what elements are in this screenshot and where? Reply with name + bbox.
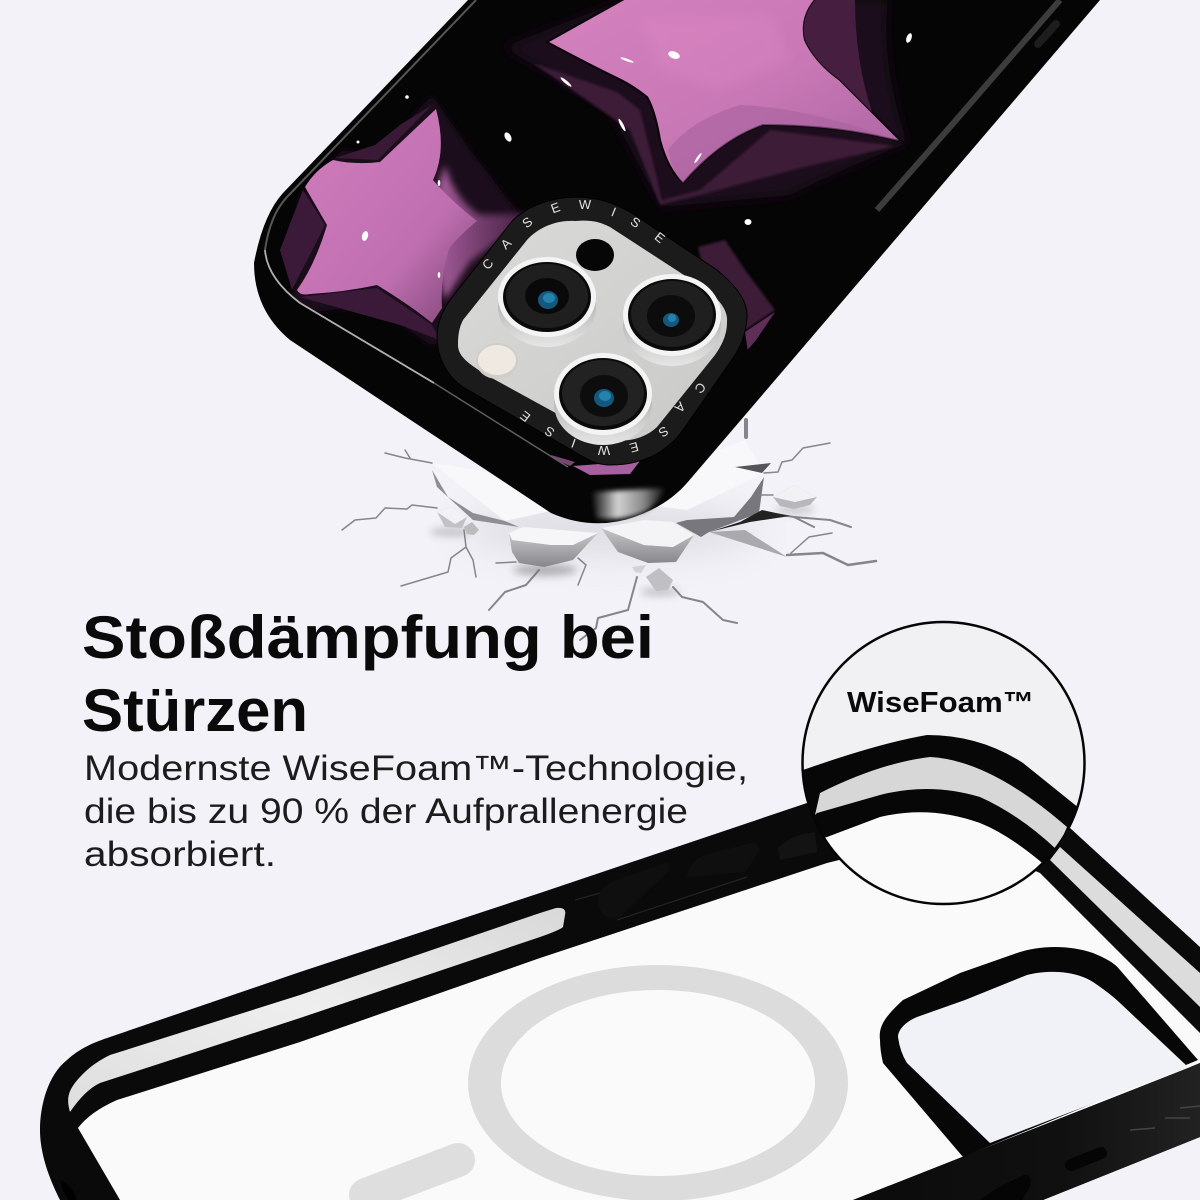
CASEWISE engraved text top bbox=[479, 197, 668, 272]
CASEWISE engraved text top: W bbox=[579, 197, 592, 212]
foam strip right bbox=[1050, 847, 1200, 1007]
foam strip left bbox=[68, 908, 565, 1112]
third star behind camera bbox=[698, 240, 775, 330]
CASEWISE engraved text bottom: S bbox=[542, 423, 557, 440]
lens 2 bbox=[623, 274, 721, 366]
CASEWISE engraved text bottom: E bbox=[628, 439, 640, 456]
phone with star case bbox=[254, 0, 1100, 523]
camera cut-out bbox=[880, 947, 1198, 1157]
camera module bbox=[437, 197, 747, 465]
fragment: centre chunk bbox=[601, 520, 694, 563]
clear case with black bumper bbox=[40, 780, 1200, 1200]
bumper lower-left slot bbox=[60, 1180, 77, 1200]
big star bbox=[503, 0, 907, 207]
CASEWISE engraved text bottom: S bbox=[655, 423, 671, 441]
microphone hole bbox=[576, 239, 614, 271]
WiseFoam magnifier callout bbox=[801, 620, 1086, 906]
CASEWISE engraved text top: E bbox=[652, 229, 668, 246]
phone edge highlights bbox=[265, 0, 476, 250]
bumper highlight streaks bbox=[1130, 1106, 1200, 1130]
flash bbox=[476, 343, 518, 379]
clear back panel bbox=[78, 849, 1200, 1200]
bottom corner reflection bbox=[592, 488, 665, 519]
heading: Stürzen bbox=[82, 677, 308, 744]
camera window bbox=[458, 221, 727, 440]
camera bezel bbox=[437, 197, 747, 465]
impact cracks in the ground bbox=[342, 420, 876, 640]
MagSafe alignment bar bbox=[366, 1160, 458, 1195]
CASEWISE engraved text bottom: A bbox=[672, 399, 688, 416]
CASEWISE engraved text top: C bbox=[479, 255, 496, 272]
CASEWISE engraved text bottom: I bbox=[569, 436, 578, 451]
lens 3 bbox=[554, 353, 652, 445]
CASEWISE engraved text bottom: E bbox=[517, 408, 533, 425]
body text: die bis zu 90 % der Aufprallenergie bbox=[84, 792, 688, 831]
fragment: left chunk bbox=[509, 527, 598, 567]
case bumper bbox=[40, 780, 1200, 1200]
body text: Modernste WiseFoam™-Technologie, bbox=[84, 749, 748, 788]
CASEWISE engraved text top: S bbox=[628, 214, 644, 231]
heading bbox=[82, 604, 654, 744]
MagSafe ring bbox=[468, 965, 848, 1200]
CASEWISE engraved text bottom: W bbox=[597, 443, 610, 458]
CASEWISE engraved text top: I bbox=[609, 204, 618, 219]
CASEWISE engraved text top: S bbox=[519, 214, 536, 231]
right slab edge and crevice bbox=[676, 477, 764, 537]
purple sliver under camera bbox=[551, 455, 640, 475]
small star bbox=[280, 95, 535, 345]
lower bumper buttons bbox=[980, 1153, 1101, 1200]
callout label: WiseFoam™ bbox=[847, 687, 1034, 719]
crack lines bbox=[342, 420, 876, 640]
lower bumper shading bbox=[853, 1063, 1200, 1200]
left slab edge bbox=[432, 470, 519, 527]
CASEWISE engraved text bottom: C bbox=[692, 380, 709, 397]
star artwork bbox=[280, 0, 913, 352]
side buttons bbox=[575, 832, 817, 920]
body text bbox=[84, 749, 748, 874]
CASEWISE engraved text top: A bbox=[498, 235, 514, 252]
body text: absorbiert. bbox=[84, 835, 276, 874]
small pebbles bbox=[437, 485, 817, 591]
rock fragment shadows bbox=[513, 564, 577, 576]
lens 1 bbox=[498, 257, 596, 347]
heading: Stoßdämpfung bei bbox=[82, 604, 654, 671]
glossy highlights bbox=[356, 32, 913, 278]
CASEWISE engraved text top: E bbox=[549, 199, 562, 216]
phone body bbox=[254, 0, 1100, 523]
CASEWISE engraved text bottom bbox=[517, 380, 709, 458]
